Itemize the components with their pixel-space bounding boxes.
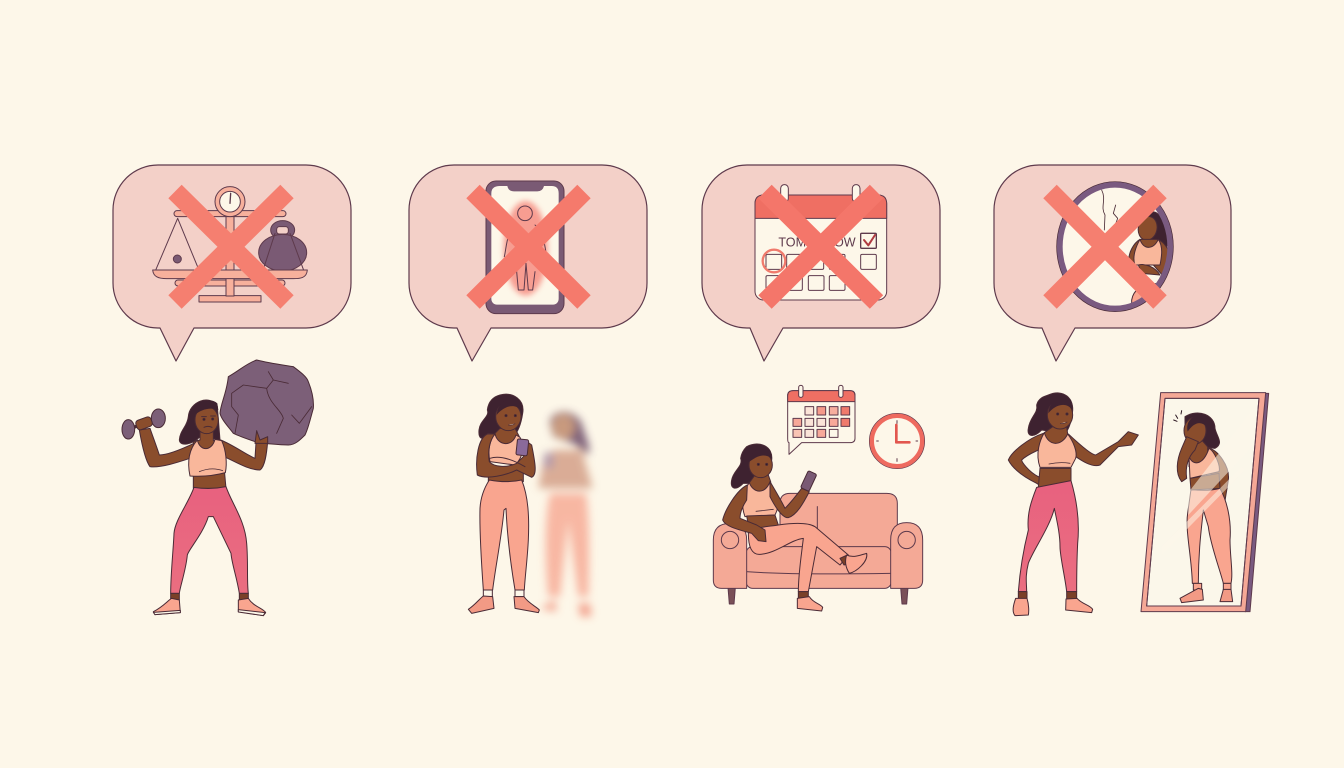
panel: social comparison xyxy=(409,165,647,617)
top xyxy=(1038,433,1076,467)
top xyxy=(489,433,523,465)
hand to chin xyxy=(1177,437,1198,482)
top reflection xyxy=(1189,448,1219,478)
leggings xyxy=(171,487,248,593)
leggings reflection xyxy=(1187,488,1232,583)
icon: sofa xyxy=(713,493,923,604)
icon: phone with glowing body xyxy=(486,181,564,314)
arms xyxy=(139,428,194,467)
arms xyxy=(1008,433,1050,490)
leggings xyxy=(1018,481,1078,592)
panel: weight pressure xyxy=(113,165,351,616)
icon: cracked oval mirror xyxy=(1057,182,1173,312)
calendar label: TOMORROW xyxy=(778,236,856,250)
speech bubble 4 xyxy=(994,165,1231,361)
dumbbell xyxy=(128,418,158,429)
body xyxy=(193,430,226,488)
icon: calendar thought bubble xyxy=(788,385,855,454)
right arm reflection xyxy=(1207,447,1229,500)
crossed legs xyxy=(748,523,848,592)
leggings xyxy=(480,480,529,590)
shoes xyxy=(153,598,180,615)
phone xyxy=(800,471,817,491)
shoes xyxy=(1013,598,1029,616)
arms xyxy=(723,485,766,542)
icon: tomorrow calendar xyxy=(755,185,887,300)
speech bubble 2 xyxy=(409,165,647,361)
boulder xyxy=(220,360,313,445)
icon: clock xyxy=(869,413,925,469)
panel: procrastination xyxy=(702,165,940,611)
speech bubble 1 xyxy=(113,165,351,361)
figure: woman with phone xyxy=(468,394,539,613)
hair xyxy=(179,400,220,444)
top xyxy=(743,482,778,517)
figure: woman on sofa xyxy=(723,444,867,611)
icon: red cross xyxy=(765,192,876,302)
icon: balance scale xyxy=(153,187,307,302)
icon: standing mirror xyxy=(1141,393,1269,612)
figure: blurred comparison woman xyxy=(538,412,593,617)
figure: confident woman xyxy=(1008,393,1138,616)
top xyxy=(189,439,226,476)
figure: woman with dumbbell and boulder xyxy=(122,360,313,616)
icon: red cross xyxy=(175,192,287,302)
panel: self criticism xyxy=(994,165,1269,616)
icon: red cross xyxy=(473,192,584,302)
crossed arms xyxy=(477,434,535,477)
speech bubble 3 xyxy=(702,165,940,361)
shoes xyxy=(468,596,494,613)
phone xyxy=(516,439,529,456)
glass glare xyxy=(1188,439,1255,515)
figure: reflection xyxy=(1176,412,1255,604)
icon: red cross xyxy=(1050,192,1160,302)
